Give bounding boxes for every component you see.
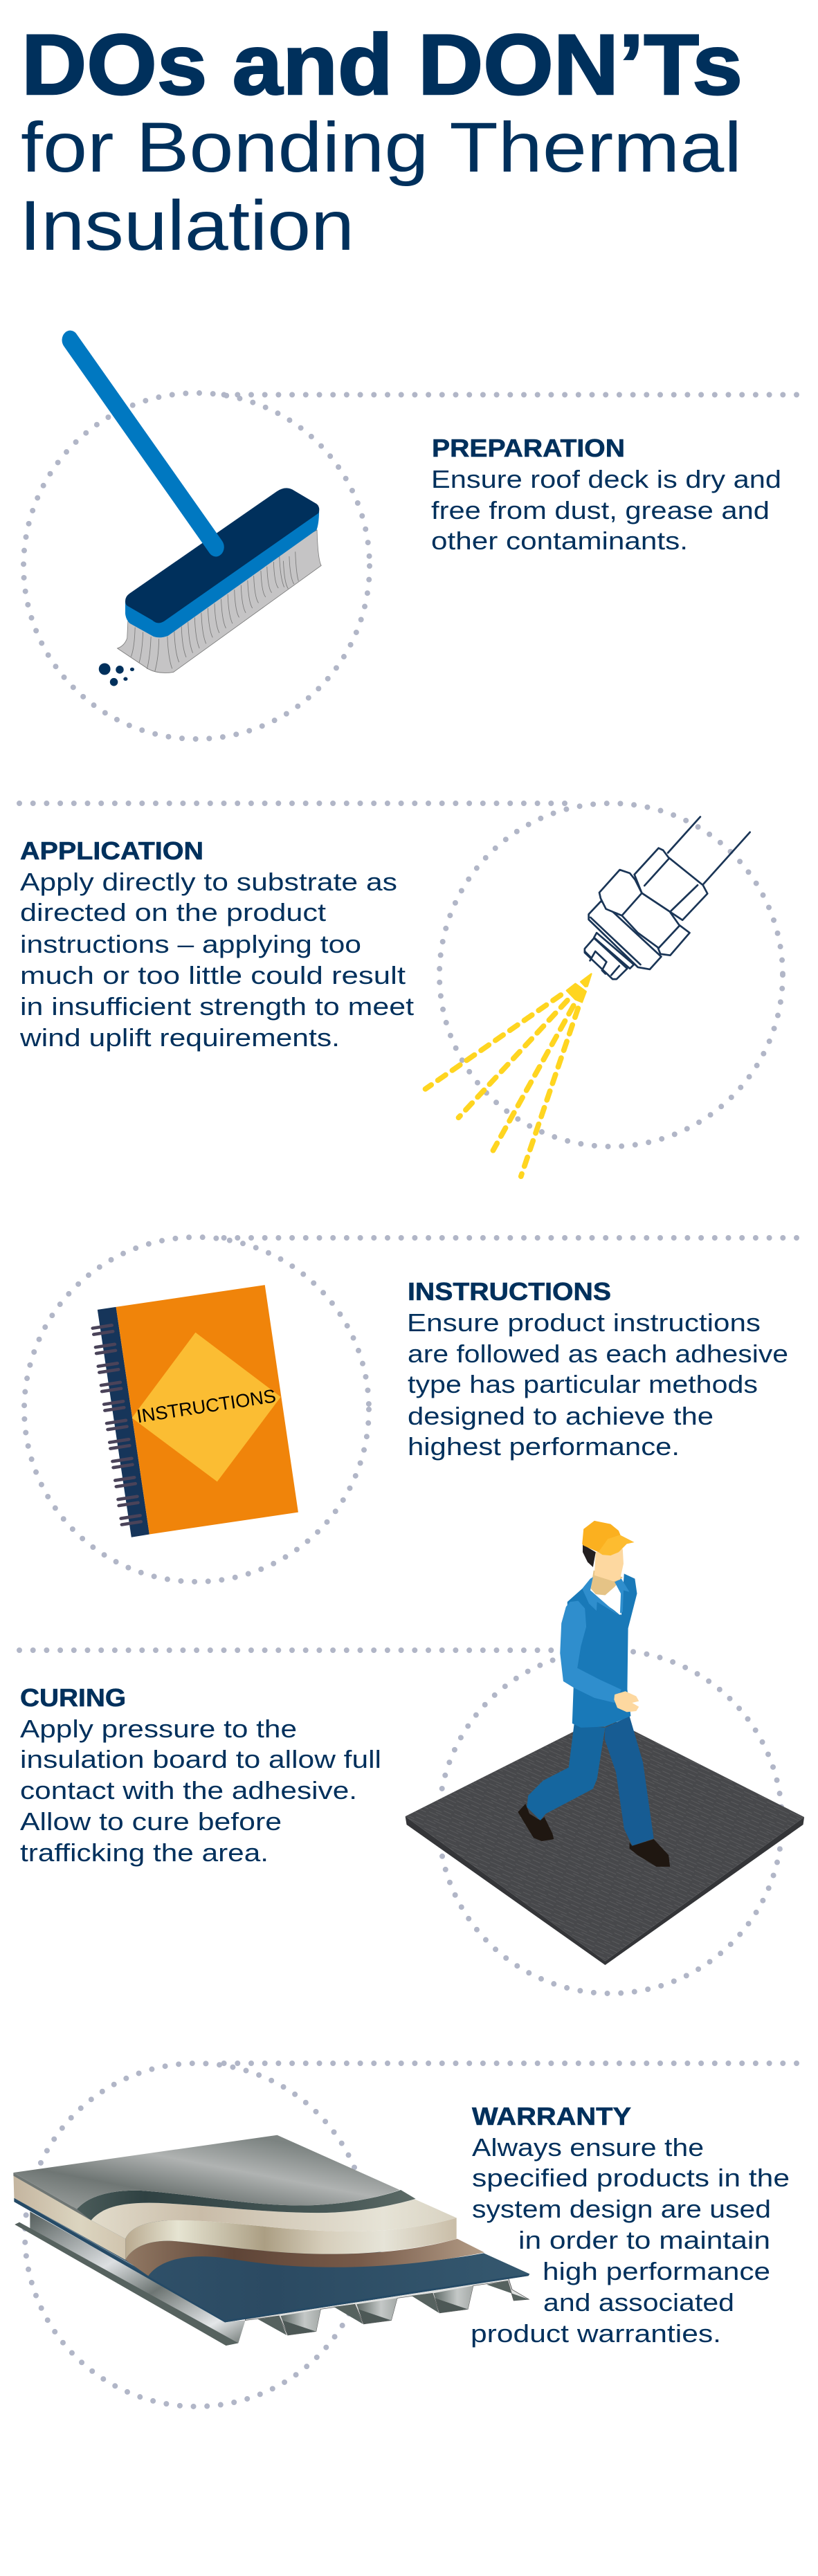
text block: warranty: [471, 2133, 790, 2348]
text block: instructions: [407, 1308, 788, 1461]
icon: spray nozzle: [426, 817, 750, 1176]
dotted circle and rule: [24, 393, 797, 739]
icon: roof system layers: [13, 2135, 529, 2346]
text block: instructions: Ensure product instructions: [407, 1308, 761, 1337]
vapour layer: [14, 2198, 529, 2322]
worker: [518, 1521, 670, 1867]
heading: warranty: WARRANTY: [472, 2102, 631, 2130]
text block: application: in insufficient strength to meet: [20, 992, 414, 1021]
text block: instructions: are followed as each adhesive: [408, 1340, 788, 1368]
text block: warranty: and associated: [543, 2288, 734, 2317]
dotted circle and rule: [19, 803, 783, 1147]
panel: preparation: [24, 340, 797, 739]
text block: curing: insulation board to allow full: [20, 1745, 381, 1773]
heading: instructions: INSTRUCTIONS: [408, 1277, 611, 1306]
text block: preparation: free from dust, grease and: [431, 496, 770, 524]
heading: curing: CURING: [20, 1683, 126, 1712]
heading: application: APPLICATION: [20, 837, 203, 865]
insulation board: [406, 1716, 804, 1965]
text block: curing: contact with the adhesive.: [20, 1776, 357, 1805]
title line: DOs and DON'Ts: DOs and DON’Ts: [21, 17, 743, 113]
panel: warranty: [13, 2063, 797, 2406]
text block: instructions: type has particular methods: [408, 1370, 758, 1398]
panel: curing: [19, 1521, 804, 1993]
text block: curing: [20, 1715, 381, 1867]
text block: curing: Apply pressure to the: [20, 1715, 297, 1743]
membrane: [13, 2135, 400, 2209]
spray: [426, 974, 591, 1176]
text block: application: Apply directly to substrate as: [20, 868, 397, 896]
text block: warranty: high performance: [543, 2257, 770, 2285]
text block: application: wind uplift requirements.: [19, 1023, 340, 1052]
text block: warranty: product warranties.: [471, 2319, 721, 2348]
dotted circle and rule: [24, 1237, 797, 1582]
icon: instruction book: [93, 1285, 298, 1537]
text block: instructions: designed to achieve the: [408, 1402, 714, 1430]
text block: preparation: [431, 465, 781, 555]
insulation board: [13, 2173, 125, 2260]
text block: curing: Allow to cure before: [20, 1807, 282, 1836]
text block: curing: trafficking the area.: [20, 1838, 269, 1867]
text block: instructions: highest performance.: [408, 1432, 680, 1461]
text block: warranty: in order to maintain: [518, 2226, 770, 2254]
book label: INSTRUCTIONS: [135, 1385, 278, 1427]
text block: application: [19, 868, 414, 1052]
spiral binding: [93, 1325, 141, 1525]
dotted circle and rule: [19, 1650, 782, 1993]
text block: application: directed on the product: [20, 898, 326, 926]
dust particles: [99, 663, 134, 686]
text block: warranty: system design are used: [472, 2195, 771, 2223]
icon: broom: [70, 340, 321, 686]
title: [19, 17, 743, 265]
metal deck: [15, 2211, 529, 2346]
adhesive layer: [125, 2239, 484, 2276]
text block: warranty: Always ensure the: [472, 2133, 704, 2162]
heading: preparation: PREPARATION: [432, 434, 625, 462]
text block: preparation: Ensure roof deck is dry and: [431, 465, 781, 493]
dotted circle and rule: [25, 2063, 797, 2406]
panel: application: [19, 803, 783, 1176]
text block: warranty: specified products in the: [472, 2164, 790, 2192]
text block: preparation: other contaminants.: [431, 527, 688, 555]
icon: worker on insulation board: [406, 1521, 804, 1965]
membrane edge: [77, 2190, 416, 2220]
text block: application: instructions – applying too: [20, 930, 361, 958]
title line: Insulation: Insulation: [19, 186, 354, 265]
panel: instructions: [24, 1237, 797, 1582]
title line: for Bonding Thermal: for Bonding Thermal: [21, 108, 742, 187]
text block: application: much or too little could result: [20, 961, 406, 989]
